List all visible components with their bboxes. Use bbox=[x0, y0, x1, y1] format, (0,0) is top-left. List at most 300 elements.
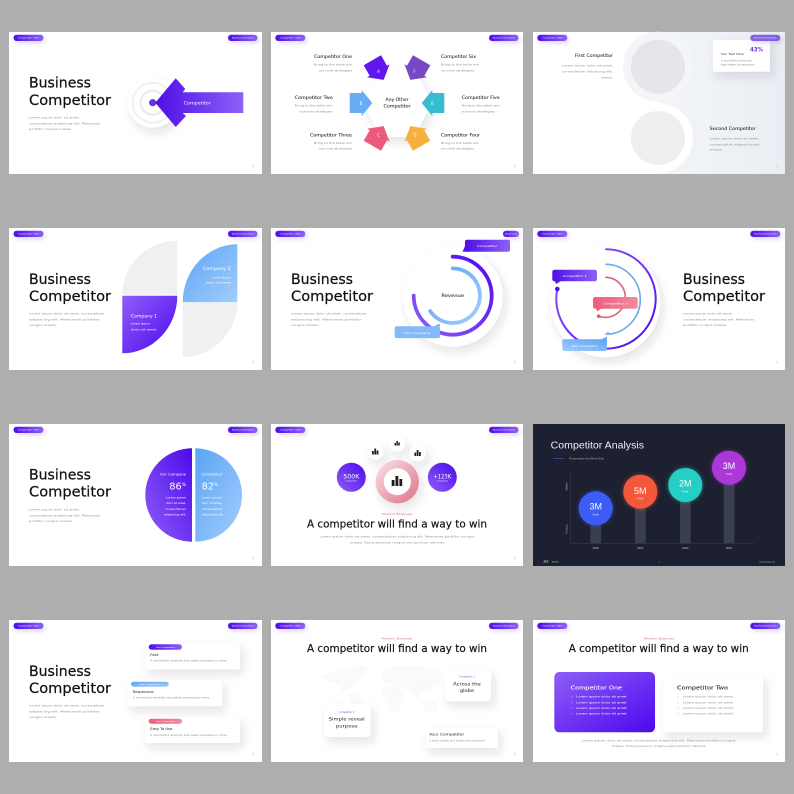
card: easy to use: Your Competitor bbox=[156, 720, 175, 723]
right pill: Business Revolution bbox=[493, 625, 516, 628]
card: competitor one: Lorem ipsum dolor sit amet bbox=[576, 695, 628, 699]
right pill: Business Revolution bbox=[754, 233, 777, 236]
company 1 quarter: dolor sit amet bbox=[131, 328, 157, 332]
slide 4: quarter circles bbox=[9, 228, 262, 370]
body text bbox=[29, 312, 106, 327]
icon: small chart top bbox=[389, 436, 405, 452]
left pill bbox=[14, 623, 44, 629]
card: your competitor: A wide variety and similar services good bbox=[429, 738, 485, 742]
card: competitor one bbox=[554, 672, 655, 732]
right pill: Business bbox=[505, 234, 517, 236]
competitor 1 bubble bbox=[552, 270, 597, 284]
left pill bbox=[275, 231, 305, 237]
label: competitor three: survival strategies bbox=[319, 147, 353, 151]
company 1 quarter: Company 1 bbox=[131, 313, 158, 318]
arrow F: F bbox=[413, 69, 416, 74]
label: competitor four bbox=[441, 132, 480, 151]
arrow: Competitor bbox=[184, 100, 211, 106]
body text: Lorem ipsum dolor sit amet, consectetuer adipiscing elit. Maecenas porttitor congue bbox=[320, 535, 475, 539]
competitor half: dolor sit amet, bbox=[202, 501, 222, 505]
card: easy to use: A wonderful serenity has taken possession mine bbox=[150, 733, 227, 737]
stat: +123K: Competitor bbox=[437, 480, 448, 482]
left pill: Competitor Offer bbox=[18, 37, 39, 40]
card: competitor two: Competitor Two bbox=[677, 686, 729, 692]
slide 1: arrow on target bbox=[9, 32, 262, 174]
right pill bbox=[750, 623, 780, 629]
label: competitor four: Bring to the table win bbox=[441, 141, 479, 145]
competitor half bbox=[195, 448, 242, 542]
card: your competitor bbox=[426, 728, 498, 748]
stat card: 43% bbox=[750, 46, 763, 53]
label: competitor six: Competitor Six bbox=[441, 54, 477, 59]
body text: porttitor congue massa. bbox=[29, 519, 73, 523]
card: competitor two: Lorem ipsum dolor sit amet bbox=[683, 706, 734, 710]
body text bbox=[683, 312, 755, 327]
axes bbox=[564, 472, 754, 544]
label: competitor one: Competitor One bbox=[314, 54, 353, 59]
right pill: Business Revolution bbox=[232, 37, 255, 40]
second competitor text: consectetuer adipiscing elit. bbox=[710, 142, 761, 146]
body text: consectetuer adipiscing elit. Maecenas bbox=[683, 317, 755, 321]
dotted world map bbox=[318, 665, 443, 715]
revenue label: Revenue bbox=[441, 293, 465, 298]
title: Competitor bbox=[29, 92, 111, 109]
card: competitor one: Competitor One bbox=[571, 686, 623, 692]
left pill bbox=[537, 35, 567, 41]
card: responsive bbox=[128, 680, 222, 706]
title bbox=[29, 75, 111, 109]
body text: Lorem ipsum dolor sit amet, bbox=[29, 508, 80, 512]
title: Competitor bbox=[29, 288, 111, 305]
arrow B: B bbox=[360, 101, 363, 106]
body text: Lorem ipsum dolor sit amet, bbox=[29, 116, 80, 120]
top ring circle bbox=[623, 32, 693, 102]
body text bbox=[320, 535, 475, 544]
heading: A competitor will find a way to win bbox=[569, 643, 749, 655]
card: competitor two: ✓ bbox=[677, 695, 680, 699]
label: competitor six: Bring to the table win bbox=[441, 63, 479, 67]
eyebrow: Modern Business bbox=[644, 636, 675, 640]
right pill bbox=[503, 231, 519, 237]
body text: consectetuer adipiscing elit. Maecenas bbox=[29, 513, 101, 517]
left pill bbox=[537, 623, 567, 629]
body text: massa. Fusce posuere, magna sed pulvinar ultricies bbox=[612, 744, 706, 748]
left pill: Competitor Offer bbox=[542, 625, 563, 628]
eyebrow: Modern Business bbox=[382, 636, 413, 640]
slide 9: dark competitor analysis chart bbox=[533, 424, 785, 566]
arrow E bbox=[422, 90, 444, 116]
page marker bbox=[514, 360, 516, 364]
card: fast: Your Competitor bbox=[156, 646, 175, 649]
slide 2: six competitors hexagon bbox=[271, 32, 523, 174]
card: simple reveal purpose: purpose bbox=[336, 723, 358, 729]
slide 10: three feature cards bbox=[9, 620, 262, 762]
card: competitor one: ✓ bbox=[571, 700, 573, 704]
arrow E: E bbox=[431, 101, 434, 106]
bar 2023: 3M bbox=[723, 461, 735, 471]
right pill bbox=[489, 427, 518, 433]
bar 2022: 2022 bbox=[682, 546, 689, 550]
title: Competitor bbox=[291, 288, 373, 305]
bottom ring circle bbox=[623, 103, 693, 173]
competitor bubble bbox=[462, 240, 510, 252]
bar 2020: Profit bbox=[593, 512, 599, 516]
bar 2020: 2020 bbox=[593, 546, 599, 550]
arrow bbox=[155, 78, 243, 127]
page marker bbox=[514, 164, 516, 168]
body text: Lorem ipsum dolor sit amet, consectetuer adipiscing elit. Maecenas porttitor congue bbox=[582, 738, 736, 742]
our company half: % bbox=[182, 482, 187, 488]
subtitle bbox=[553, 457, 605, 461]
left pill bbox=[537, 231, 567, 237]
body text: consectetuer adipiscing elit. Maecenas bbox=[29, 122, 101, 126]
icon: small chart left bbox=[367, 444, 383, 460]
label: competitor one: survival strategies bbox=[319, 69, 353, 73]
first competitor text: consectetuer adipiscing elit. bbox=[562, 69, 613, 73]
right pill bbox=[489, 623, 518, 629]
footer: JEZ bbox=[543, 560, 549, 564]
card: competitor one: Lorem ipsum dolor sit amet bbox=[576, 706, 628, 710]
body text: congue massa. bbox=[29, 715, 57, 719]
company 2 quarter: Company 2 bbox=[203, 266, 231, 271]
our company half: dolor sit amet, bbox=[166, 501, 186, 505]
page marker bbox=[252, 752, 254, 756]
page marker bbox=[776, 164, 778, 168]
slide 7: split pie bbox=[9, 424, 262, 566]
card: across the globe bbox=[445, 669, 491, 701]
label: competitor six bbox=[441, 54, 479, 73]
title bbox=[29, 663, 111, 697]
card: competitor two: Lorem ipsum dolor sit amet bbox=[683, 712, 734, 716]
our company half: Our Company bbox=[160, 472, 186, 476]
label: competitor two: Bring to the table win bbox=[295, 104, 333, 108]
slide 8: ring with stats bbox=[271, 424, 523, 566]
center hexagon: Any Other bbox=[386, 97, 409, 102]
left pill: Competitor Offer bbox=[542, 233, 563, 236]
card: your competitor: Your Competitor bbox=[429, 733, 465, 737]
icon: small chart right bbox=[410, 445, 426, 461]
bar 2022: 2M bbox=[679, 479, 692, 489]
competitor half: Lorem ipsum bbox=[202, 495, 222, 499]
label: competitor three: Competitor Three bbox=[310, 132, 353, 137]
card: competitor two: Lorem ipsum dolor sit amet bbox=[683, 700, 734, 704]
axes: Market bbox=[564, 482, 568, 491]
bar 2020: 3M bbox=[589, 501, 602, 511]
footer: 1 bbox=[658, 562, 660, 564]
competitor half: 82 bbox=[202, 482, 214, 493]
body text: Lorem ipsum dolor sit amet, consectetuer bbox=[291, 312, 368, 316]
stat: +123K bbox=[428, 463, 457, 492]
arrow F bbox=[399, 54, 433, 86]
arrow C: C bbox=[377, 132, 380, 138]
label: competitor five bbox=[462, 95, 500, 113]
title: Competitor Analysis bbox=[551, 439, 644, 451]
card: simple reveal purpose: Simple reveal bbox=[329, 717, 365, 723]
body text bbox=[29, 116, 101, 131]
label: competitor three bbox=[310, 132, 353, 151]
card: competitor two: ✓ bbox=[677, 706, 680, 710]
left pill: Competitor Offer bbox=[280, 625, 301, 628]
inner arc bbox=[430, 268, 480, 323]
page marker bbox=[776, 752, 778, 756]
company 2 quarter: Lorem ipsum bbox=[212, 275, 231, 279]
company 2 quarter bbox=[183, 244, 237, 302]
title: Business bbox=[29, 467, 91, 484]
left pill: Competitor Offer bbox=[280, 233, 301, 236]
our company half bbox=[145, 448, 192, 542]
left pill bbox=[14, 231, 44, 237]
our company bubble: Our Company bbox=[572, 344, 598, 348]
ring base bbox=[550, 247, 660, 357]
heading: A competitor will find a way to win bbox=[307, 643, 487, 655]
first competitor text: massa. bbox=[601, 75, 613, 79]
left pill bbox=[14, 427, 44, 433]
bar 2023 bbox=[712, 451, 746, 550]
stat card bbox=[713, 40, 770, 72]
label: competitor five: survival strategies bbox=[462, 109, 495, 113]
company 2 quarter: dolor sit amet bbox=[206, 281, 232, 285]
right pill: Business Revolution bbox=[232, 625, 255, 628]
our company half: consectetuer bbox=[165, 507, 187, 511]
stat: 500K bbox=[337, 463, 366, 492]
first competitor text: First Competitor bbox=[575, 53, 613, 58]
body text: congue massa. bbox=[291, 323, 319, 327]
stat card: A wonderful serenity bbox=[721, 58, 752, 62]
card: responsive: Responsive bbox=[133, 690, 154, 694]
stat card: has taken possession bbox=[721, 63, 755, 67]
title bbox=[291, 271, 373, 305]
our company bubble: Our Company bbox=[404, 331, 430, 335]
label: competitor one bbox=[314, 54, 353, 73]
label: competitor five: Competitor Five bbox=[462, 95, 500, 100]
center hexagon bbox=[365, 70, 430, 135]
title: Business bbox=[683, 271, 745, 288]
stat: 500K: Competitor bbox=[346, 480, 357, 482]
inner arc bbox=[597, 277, 625, 318]
company 1 quarter: Lorem ipsum bbox=[131, 322, 150, 326]
body text: adipiscing elit. Maecenas porttitor bbox=[291, 317, 363, 321]
body text: Lorem ipsum dolor sit amet, consectetuer bbox=[29, 312, 106, 316]
gray quarter bottom-right bbox=[183, 303, 237, 357]
arrow C bbox=[361, 120, 395, 152]
bar 2021: 2021 bbox=[637, 546, 644, 550]
arrow B bbox=[350, 90, 372, 116]
card: across the globe: Competitor 2 bbox=[459, 676, 475, 679]
competitor half: consectetuer bbox=[202, 507, 224, 511]
competitor 3 bubble: Competitor 3 bbox=[604, 302, 628, 306]
right pill bbox=[228, 35, 258, 41]
second competitor text: Lorem ipsum dolor sit amet, bbox=[710, 137, 759, 141]
our company half: adipiscing elit. bbox=[164, 513, 186, 517]
label: competitor two: survival strategies bbox=[300, 109, 333, 113]
stat: 500K: 500K bbox=[343, 473, 360, 480]
title: Competitor bbox=[29, 680, 111, 697]
body text bbox=[29, 704, 106, 719]
arrow A: A bbox=[377, 69, 380, 74]
our company bubble bbox=[562, 336, 607, 351]
subtitle: Presentation by Rhett Dink bbox=[569, 457, 605, 461]
left pill: Competitor Offer bbox=[18, 429, 39, 432]
ring base bbox=[403, 247, 503, 347]
left pill: Competitor Offer bbox=[18, 233, 39, 236]
card: easy to use: Easy To Use bbox=[150, 727, 172, 731]
our company half: Lorem ipsum bbox=[166, 495, 186, 499]
arrow D: D bbox=[413, 132, 417, 138]
card: responsive: Your Competitor bbox=[139, 683, 160, 686]
bar 2022 bbox=[668, 468, 702, 550]
title: Competitor bbox=[29, 484, 111, 501]
first competitor text bbox=[562, 53, 613, 79]
first competitor text: Lorem ipsum dolor sit amet, bbox=[562, 63, 613, 67]
card: responsive: A wonderful serenity has taken possession mine bbox=[133, 696, 210, 700]
body text bbox=[291, 312, 368, 327]
body text bbox=[29, 508, 101, 523]
label: competitor three: Bring to the table win bbox=[314, 141, 352, 145]
card: fast bbox=[145, 643, 240, 669]
bar 2020 bbox=[579, 491, 613, 550]
card: simple reveal purpose bbox=[324, 704, 371, 737]
page marker bbox=[252, 360, 254, 364]
slide 12: competitor comparison cards bbox=[533, 620, 785, 762]
slide 5: revenue rings bbox=[271, 228, 523, 370]
competitor half: Competitor bbox=[202, 472, 223, 476]
page marker bbox=[776, 360, 778, 364]
card: competitor one: ✓ bbox=[571, 695, 573, 699]
bar 2022: Profit bbox=[682, 490, 689, 494]
competitor 3 bubble bbox=[593, 297, 638, 312]
second competitor text: Second Competitor bbox=[710, 126, 756, 131]
card: across the globe: Across the bbox=[453, 682, 481, 688]
body text: porttitor congue massa. bbox=[29, 127, 72, 131]
label: competitor four: survival strategies bbox=[441, 147, 475, 151]
left pill: Competitor Offer bbox=[280, 429, 301, 432]
right pill: Business Revolution bbox=[493, 37, 516, 40]
title bbox=[29, 467, 111, 501]
card: competitor one: ✓ bbox=[571, 706, 573, 710]
card: competitor two: ✓ bbox=[677, 712, 680, 716]
slide 3: first and second competitor circles bbox=[533, 32, 785, 174]
competitor half: % bbox=[214, 482, 219, 488]
slide 6: three orbit rings bbox=[533, 228, 785, 370]
page marker bbox=[252, 164, 254, 168]
competitor half: adipiscing elit. bbox=[202, 513, 224, 517]
bar 2021: 5M bbox=[634, 486, 647, 496]
title: Business bbox=[291, 271, 353, 288]
page marker bbox=[252, 556, 254, 560]
center ring icon bbox=[376, 460, 419, 503]
left pill: Competitor Offer bbox=[542, 37, 563, 40]
right tinted area bbox=[658, 32, 785, 174]
label: competitor six: survival strategies bbox=[441, 69, 475, 73]
right pill bbox=[228, 231, 258, 237]
footer: Website bbox=[552, 560, 560, 564]
right pill bbox=[228, 427, 258, 433]
body text: adipiscing elit. Maecenas porttitor bbox=[29, 709, 101, 713]
card: competitor one: Lorem ipsum dolor sit amet bbox=[576, 712, 628, 716]
label: competitor one: Bring to the table win bbox=[314, 63, 352, 67]
second competitor text bbox=[710, 126, 761, 152]
card: simple reveal purpose: Competitor 1 bbox=[339, 711, 355, 714]
right pill bbox=[489, 35, 518, 41]
body text: porttitor congue massa. bbox=[683, 323, 727, 327]
title bbox=[29, 271, 111, 305]
arrow A bbox=[361, 54, 395, 86]
right pill: Business Revolution bbox=[232, 429, 255, 432]
our company half: 86 bbox=[169, 482, 182, 493]
right pill: Business Revolution bbox=[493, 429, 516, 432]
middle arc bbox=[605, 264, 640, 335]
bar 2021: Profit bbox=[637, 497, 644, 501]
page marker bbox=[514, 752, 516, 756]
right pill bbox=[750, 35, 780, 41]
card: competitor two: Lorem ipsum dolor sit amet bbox=[683, 695, 734, 699]
competitor bubble: Competitor bbox=[477, 244, 498, 248]
bar 2021 bbox=[623, 475, 657, 550]
title: Business bbox=[29, 663, 91, 680]
card: fast: Fast bbox=[150, 653, 159, 657]
label: competitor two: Competitor Two bbox=[295, 95, 333, 100]
left pill: Competitor Offer bbox=[18, 625, 39, 628]
right pill: Business Revolution bbox=[754, 37, 777, 40]
outer arc bbox=[555, 249, 656, 349]
slide 11: world map cards bbox=[271, 620, 523, 762]
outer arc bbox=[414, 257, 492, 335]
competitor 1 bubble: Competitor 1 bbox=[563, 274, 587, 278]
arrow D bbox=[399, 120, 433, 152]
stat card: Your Text Here bbox=[721, 52, 744, 56]
second competitor text: massa. bbox=[710, 148, 723, 152]
body text: adipiscing elit. Maecenas porttitor bbox=[29, 317, 101, 321]
center hexagon: Competitor bbox=[384, 104, 411, 108]
page marker bbox=[514, 556, 516, 560]
title: Business bbox=[29, 75, 91, 92]
title: Competitor bbox=[683, 288, 765, 305]
axes: Product bbox=[564, 524, 568, 533]
label: competitor two bbox=[295, 95, 333, 113]
right pill bbox=[228, 623, 258, 629]
body text: Lorem ipsum dolor sit amet, consectetuer bbox=[29, 704, 106, 708]
left pill bbox=[275, 35, 305, 41]
card: competitor one: ✓ bbox=[571, 712, 573, 716]
body text bbox=[582, 738, 736, 748]
footer bbox=[543, 560, 775, 564]
title: Business bbox=[29, 271, 91, 288]
left pill: Competitor Offer bbox=[280, 37, 301, 40]
right pill: Business Revolution bbox=[754, 625, 777, 628]
left pill bbox=[275, 427, 305, 433]
card: across the globe: globe bbox=[460, 688, 474, 694]
body text: congue massa. bbox=[29, 323, 57, 327]
card: competitor two bbox=[663, 675, 763, 732]
card: competitor one: Lorem ipsum dolor sit amet bbox=[576, 700, 628, 704]
body text: Lorem ipsum dolor sit amet, bbox=[683, 312, 733, 316]
title bbox=[683, 271, 765, 305]
label: competitor four: Competitor Four bbox=[441, 132, 480, 137]
gray quarter top-left bbox=[122, 241, 177, 295]
company 1 quarter bbox=[122, 296, 177, 353]
card: competitor two: ✓ bbox=[677, 700, 680, 704]
card: easy to use bbox=[145, 717, 240, 743]
right pill bbox=[750, 231, 780, 237]
right pill: Business Revolution bbox=[232, 233, 255, 236]
body text: massa. Fusce posuere, magna sed pulvinar ultricies bbox=[350, 540, 445, 544]
eyebrow: Modern Business bbox=[382, 512, 413, 516]
heading: A competitor will find a way to win bbox=[307, 519, 487, 531]
footer: www.website.com bbox=[759, 560, 775, 564]
label: competitor five: Bring to the table win bbox=[462, 104, 500, 108]
icon: target rings bbox=[128, 78, 178, 128]
left pill bbox=[14, 35, 44, 41]
